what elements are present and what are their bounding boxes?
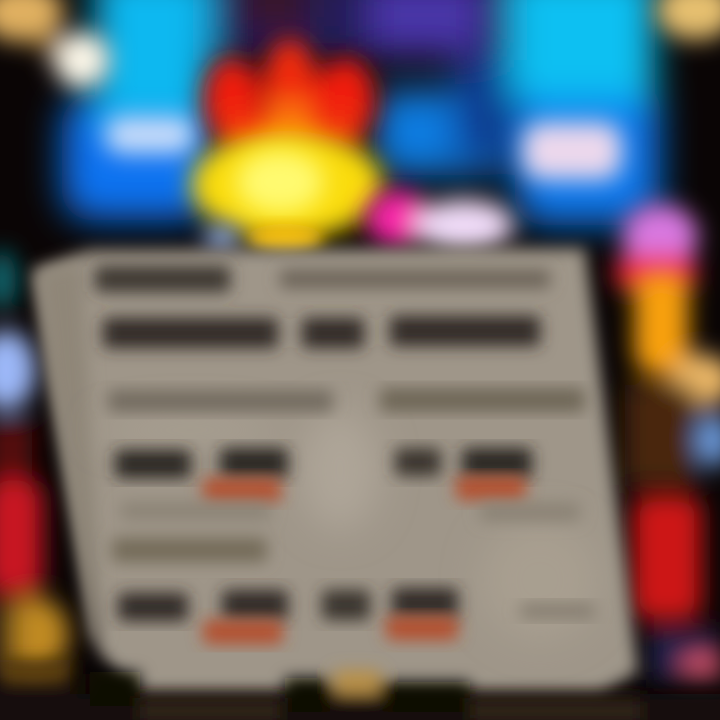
subheading bars [108,388,585,412]
panel: paper page [32,248,638,694]
background: pink and white glow [204,190,514,252]
left side decoration [0,250,69,673]
page fold [38,262,102,640]
heading bars [95,266,550,348]
second row of dark labels with red underlines [118,588,595,644]
bottom dark strip [0,660,720,720]
right side decoration [615,204,720,680]
background: blue arch [62,0,660,225]
faint text row [112,503,580,562]
icon: flame [191,38,383,252]
page texture [100,410,600,640]
background: light highlights and corners [0,0,720,180]
first row of dark labels with red underlines [115,448,532,502]
